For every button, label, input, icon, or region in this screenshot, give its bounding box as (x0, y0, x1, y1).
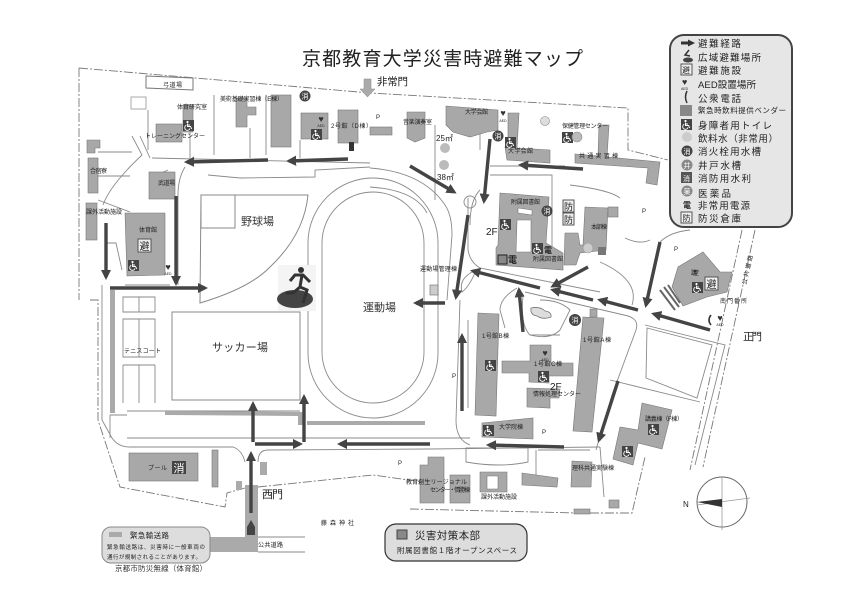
legend labels: 身障者用トイレ (698, 120, 772, 132)
building labels: 附属図書館 (533, 255, 563, 263)
building labels: 大学院棟 (499, 423, 523, 431)
pond (531, 307, 551, 318)
soccer field: サッカー場 (212, 341, 268, 354)
panel: emergency transport route note: 緊急輸送路は、災害時に一般車両の (107, 543, 205, 551)
radio note: 京都市防災無線（体育館） (115, 563, 207, 573)
disaster headquarters and power icons: 電 (508, 255, 517, 265)
evacuation facility icons: 防 (564, 214, 573, 225)
gate arrow: emergency gate (360, 79, 375, 97)
building labels: 合宿寮 (90, 167, 107, 175)
legend icons: 避 (682, 66, 690, 75)
building labels: 1号館A棟 (583, 336, 611, 344)
building labels: 情報処理センター (533, 390, 581, 398)
compass (683, 477, 750, 530)
disaster headquarters and power icons (498, 246, 552, 265)
legend labels: 飲料水（非常用） (698, 133, 778, 145)
legend labels: 消火栓用水槽 (698, 146, 761, 158)
icons: AED locations: AED (317, 124, 325, 128)
campus base map: boundary and roads (79, 68, 755, 552)
panel: emergency transport route note: 緊急輸送路 (130, 530, 170, 540)
icons: AED locations: ♥ (165, 262, 171, 272)
icon: west gate marker (247, 520, 255, 535)
panel: disaster headquarters: 附属図書館１階オープンスペース (397, 545, 517, 555)
evacuation facility icons: 防 (564, 201, 573, 212)
building labels: 大学会館 (465, 108, 488, 116)
legend icons (680, 40, 695, 223)
building labels: 講義棟（F棟） (645, 415, 683, 423)
area and floor labels: P (376, 115, 380, 121)
area and floor labels: P (452, 374, 456, 380)
panel: disaster headquarters (385, 524, 527, 561)
icons: AED locations: ♥ (318, 114, 324, 124)
area and floor labels: 25㎡ (436, 134, 453, 143)
building labels: 南門番所 (720, 297, 747, 305)
title: 京都教育大学災害時避難マップ (302, 48, 583, 70)
label: athletic field: 運動場 (363, 300, 396, 314)
legend labels: 井戸水槽 (698, 160, 741, 172)
building labels: 大学会館 (508, 147, 533, 155)
track and field ground (308, 178, 438, 418)
building labels: 教育創生リージョナル (406, 478, 467, 486)
legend labels: AED設置場所 (698, 79, 756, 91)
compass: N (683, 500, 689, 509)
legend icons: 防 (682, 213, 690, 223)
building labels: 1号館B棟 (482, 332, 509, 340)
legend icons: 電 (683, 201, 691, 210)
legend labels: 医薬品 (698, 188, 731, 200)
area and floor labels: 2F (486, 227, 498, 238)
soccer field (172, 312, 300, 400)
area and floor labels: P (642, 209, 646, 215)
icons: AED locations: AED (541, 358, 549, 362)
building labels: 課外活動施設 (86, 208, 122, 216)
icons: AED locations: AED (499, 119, 507, 123)
disaster headquarters and power icons: 電 (544, 246, 552, 255)
tennis courts (123, 297, 161, 403)
legend icons: ♥ (682, 77, 687, 87)
icons: AED locations: AED (716, 323, 724, 327)
building labels: 課外活動施設 (481, 493, 517, 501)
area and floor labels: 38㎡ (437, 173, 454, 182)
legend labels: 緊急時飲料提供ベンダー (698, 105, 786, 115)
icons: AED locations: ♥ (542, 348, 548, 358)
gate labels (262, 75, 762, 501)
baseball field: 野球場 (241, 215, 274, 228)
building labels: 講堂 (691, 269, 699, 277)
legend labels: 避難施設 (698, 65, 741, 77)
tennis courts: テニスコート (124, 348, 161, 355)
building labels: 保健管理センター (562, 122, 608, 130)
icons: AED locations (164, 108, 724, 362)
building labels: プール (148, 465, 167, 472)
building labels: トレーニングセンター (145, 132, 205, 140)
legend labels: 非常用電源 (698, 200, 750, 212)
icons: fire hydrant tanks: 消 (494, 132, 502, 140)
building labels: 弓道場 (163, 81, 182, 89)
icon: running figure at wide-area evacuation site (277, 265, 316, 311)
icons: fire hydrant tanks: 消 (302, 92, 308, 100)
icons: fire hydrant tanks: 消 (572, 316, 578, 324)
buildings (86, 76, 732, 514)
road ovals near the central roundabout (464, 196, 476, 208)
gate labels: 非常門 (377, 75, 408, 88)
legend panel (670, 35, 792, 227)
building labels: センター・情勝棟 (430, 486, 470, 494)
icons: fire hydrant tanks (172, 90, 581, 475)
icons: fire hydrant tanks: 消 (544, 206, 550, 216)
legend icons: 消 (683, 174, 690, 183)
building labels: 公共道路 (258, 541, 283, 549)
building labels (86, 81, 755, 549)
emergency transport route bars (110, 290, 425, 552)
evacuation facility icons: 避 (140, 241, 150, 253)
legend labels: 消防用水利 (698, 173, 751, 185)
icons: AED locations: AED (164, 272, 172, 276)
baseball field (200, 195, 308, 303)
building labels: 体育研究室 (177, 103, 207, 111)
building labels: 1号館C棟 (534, 360, 562, 368)
area and floor labels: 2F (550, 382, 562, 393)
panel: emergency transport route note (102, 527, 210, 563)
area and floor labels (376, 115, 678, 467)
building labels: 美術基礎実習棟（E棟） (220, 95, 283, 103)
legend labels: 防災倉庫 (698, 213, 741, 225)
evacuation route arrows (106, 139, 710, 513)
panel: emergency transport route note: 通行が規制されることがあります。 (107, 553, 201, 561)
icons: fire hydrant tanks: 消 (174, 461, 184, 475)
building labels: 共通実習棟 (579, 152, 618, 160)
legend labels: 広域避難場所 (698, 52, 761, 64)
building labels: 2号館（D棟） (331, 122, 372, 130)
icons: accessible toilets (128, 120, 703, 457)
building labels: 体育館 (139, 226, 157, 234)
legend labels: 公衆電話 (698, 93, 741, 105)
building labels: 公共道路 (740, 254, 755, 285)
legend icons: 井 (684, 161, 690, 170)
legend icons: 薬 (684, 187, 690, 196)
area and floor labels: P (542, 430, 546, 436)
area and floor labels: P (398, 461, 402, 467)
icons: AED locations: ♥ (717, 313, 723, 323)
icon: phone (709, 315, 711, 325)
building labels: 運動場管理棟 (420, 265, 457, 273)
building labels: 理科共通実験棟 (572, 464, 614, 472)
gate labels: 正門 (743, 331, 762, 343)
evacuation facility icons (138, 200, 718, 291)
building labels: 附属図書館 (511, 198, 540, 206)
building labels: 武道場 (158, 179, 175, 187)
legend labels: 避難経路 (698, 38, 741, 50)
legend labels (698, 38, 786, 225)
evacuation facility icons: 避 (706, 279, 716, 291)
icons: AED locations: ♥ (500, 108, 506, 118)
legend icons: 消 (684, 147, 690, 156)
gate labels: 西門 (262, 488, 283, 501)
area and floor labels: P (674, 247, 678, 253)
building labels: 藤森神社 (321, 519, 354, 527)
icons: drinking water and medicine (349, 132, 606, 295)
panel: disaster headquarters: 災害対策本部 (415, 529, 480, 542)
building labels: 音楽演奏室 (403, 118, 432, 126)
building labels: 本部棟 (591, 223, 607, 231)
legend icons: AED (681, 87, 689, 91)
